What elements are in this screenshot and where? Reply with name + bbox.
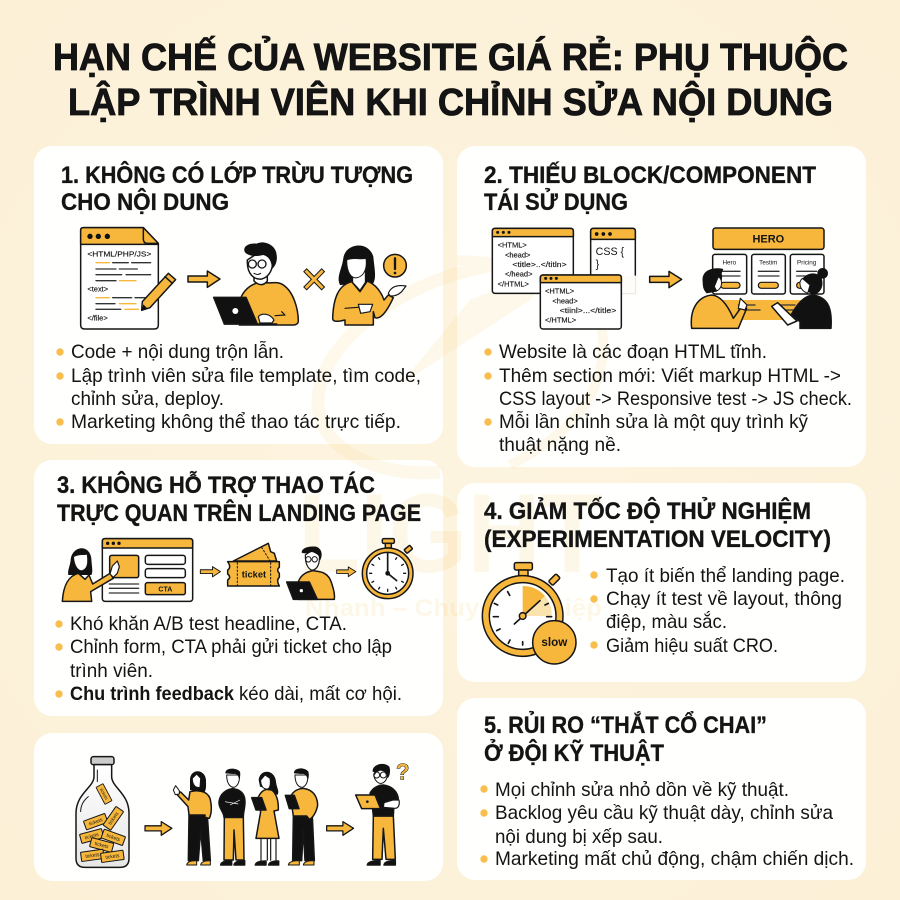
bullet list: card 5: Mọi chỉnh sửa nhỏ dồn về kỹ thuật.	[495, 779, 789, 801]
icon: HTML and CSS windows: <HTML>	[498, 241, 527, 250]
arrow	[337, 567, 356, 577]
heading: card 1: CHO NỘI DUNG	[61, 188, 229, 216]
heading: card 4	[484, 496, 831, 553]
icon: browser with woman pointing	[62, 539, 193, 601]
icon: bottle of tickets: tickets	[107, 811, 121, 826]
watermark logo	[298, 260, 603, 622]
icon: hero block board with two people: Hero	[722, 260, 737, 267]
icon: confused developer with laptop: ?	[396, 758, 410, 784]
icon: confused developer with laptop	[356, 758, 410, 865]
icon: code file with pencil: </file>	[87, 313, 108, 322]
icon: bottle of tickets: tickets	[85, 852, 100, 860]
bullet list: card 2: CSS layout -> Responsive test -> JS check.	[499, 388, 852, 410]
illustration: landing page to ticket to developer to stopwatch	[62, 539, 413, 601]
bullet list: card 1: Marketing không thể thao tác trực tiếp.	[71, 411, 401, 433]
icon: marketing woman	[333, 246, 406, 325]
icon: HTML and CSS windows: }	[596, 259, 600, 271]
heading: card 1	[61, 161, 413, 216]
heading: card 3: TRỰC QUAN TRÊN LANDING PAGE	[57, 499, 421, 527]
icon: man with crossed arms	[219, 769, 245, 865]
bullet list: card 1: Code + nội dung trộn lẫn.	[71, 340, 284, 363]
heading: card 2	[484, 161, 816, 216]
icon: bottle of tickets: tickets	[99, 787, 109, 800]
icon: HTML and CSS windows: </HTML>	[545, 316, 576, 325]
icon: developer with laptop	[214, 242, 298, 325]
title: HẠN CHẾ CỦA WEBSITE GIÁ RẺ: PHỤ THUỘC	[53, 34, 848, 79]
bullet list: card 1: chỉnh sửa, deploy.	[71, 388, 224, 410]
heading: card 2: TÁI SỬ DỤNG	[484, 187, 628, 216]
bullet list: card 2: thuật nặng nề.	[499, 434, 621, 456]
icon: bottle of tickets: tickets	[88, 817, 104, 828]
heading: card 5: 5. RỦI RO “THẮT CỔ CHAI”	[484, 710, 767, 739]
title	[53, 34, 848, 124]
icon: bottle of tickets: tickets	[105, 853, 120, 861]
bullet list: card 4: Tạo ít biến thể landing page.	[606, 565, 845, 587]
icon: bottle of tickets	[76, 757, 129, 867]
icon: slow stopwatch: slow	[541, 636, 568, 649]
icon: HTML and CSS windows: <title>..</titln>	[512, 260, 567, 269]
heading: card 5	[484, 710, 767, 767]
bullet list: card 2: Website là các đoạn HTML tĩnh.	[499, 341, 767, 363]
icon: hero block board with two people	[691, 228, 831, 328]
icon: woman in yellow dress with tablet	[252, 772, 279, 865]
icon: code file with pencil	[81, 228, 176, 329]
icon: code file with pencil: <text>	[87, 285, 108, 294]
bullet list: card 3: Chỉnh form, CTA phải gửi ticket cho lập	[70, 636, 392, 658]
icon: HTML and CSS windows: </head>	[505, 270, 532, 279]
arrow	[327, 822, 354, 835]
icon: HTML and CSS windows: <head>	[505, 250, 530, 259]
icon: woman pointing	[173, 771, 211, 865]
bullet list: card 2: Thêm section mới: Viết markup HTML ->	[499, 365, 841, 387]
bullet list: card 5: Marketing mất chủ động, chậm chiến dịch.	[495, 848, 854, 870]
bullet list: card 2	[484, 341, 852, 456]
heading: card 3: 3. KHÔNG HỖ TRỢ THAO TÁC	[57, 470, 375, 499]
bullet list: card 4: điệp, màu sắc.	[606, 610, 727, 633]
panel: card 5	[480, 710, 854, 870]
panel: card 2	[484, 161, 852, 456]
arrow	[200, 567, 220, 577]
heading: card 4: (EXPERIMENTATION VELOCITY)	[484, 526, 831, 553]
icon: bottle of tickets: tickets	[94, 841, 110, 850]
icon: HTML and CSS windows: </HTML>	[498, 279, 529, 288]
heading: card 5: Ở ĐỘI KỸ THUẬT	[484, 738, 664, 767]
icon: slow stopwatch	[482, 563, 576, 664]
bullet list: card 3: Khó khăn A/B test headline, CTA.	[70, 613, 347, 635]
bullet list: card 4	[590, 565, 845, 657]
bullet list: card 4: Chạy ít test về layout, thông	[606, 588, 842, 610]
bullet list: card 5	[480, 779, 854, 870]
panel: card backgrounds	[34, 146, 866, 881]
watermark logo: Nhanh – Chuyên nghiệp	[305, 595, 602, 622]
bullet list: card 3: trình viên.	[70, 660, 153, 682]
icon: bottle of tickets: tickets	[105, 833, 121, 843]
icon: HTML and CSS windows: <tiinl>...</title>	[560, 306, 616, 315]
heading: card 2: 2. THIẾU BLOCK/COMPONENT	[484, 161, 816, 189]
icon: HTML and CSS windows: CSS {	[596, 246, 625, 258]
bullet list: card 3: Chu trình feedback	[70, 683, 234, 705]
arrow	[650, 271, 682, 288]
arrow	[188, 271, 220, 287]
heading: card 1: 1. KHÔNG CÓ LỚP TRỪU TƯỢNG	[61, 161, 413, 189]
bullet list: card 1: Lập trình viên sửa file template, tìm code,	[71, 365, 421, 387]
bullet list: card 4: Giảm hiệu suất CRO.	[606, 635, 778, 657]
panel: card 3	[55, 470, 421, 705]
icon: man with yellow sweater and tablet	[285, 768, 318, 865]
icon: cross	[307, 272, 322, 287]
watermark logo: LIGHT	[298, 471, 603, 596]
icon: ticket: ticket	[242, 569, 266, 579]
bullet list: card 2: Mỗi lần chỉnh sửa là một quy trình kỹ	[499, 410, 808, 433]
icon: hero block board with two people: Testim	[759, 260, 777, 267]
icon: ticket	[228, 543, 279, 586]
bullet list: card 5: Backlog yêu cầu kỹ thuật dày, chỉnh sửa	[495, 802, 833, 824]
icon: code file with pencil: <HTML/PHP/JS>	[87, 250, 151, 259]
heading: card 4: 4. GIẢM TỐC ĐỘ THỬ NGHIỆM	[484, 496, 811, 525]
icon: hero block board with two people: Pricing	[797, 260, 817, 267]
icon: HTML and CSS windows: <HTML>	[545, 287, 574, 296]
title: LẬP TRÌNH VIÊN KHI CHỈNH SỬA NỘI DUNG	[68, 79, 833, 124]
bullet list: card 3	[55, 613, 402, 705]
bullet list: card 5: nội dung bị xếp sau.	[495, 826, 663, 848]
illustration: code file to developer, not marketing	[81, 228, 406, 329]
icon: HTML and CSS windows: <head>	[552, 296, 578, 305]
icon: browser with woman pointing: CTA	[158, 586, 172, 593]
bullet list: card 3: kéo dài, mất cơ hội.	[239, 683, 402, 705]
icon: bottle of tickets: tickets	[84, 832, 100, 841]
panel: card 4	[482, 496, 845, 664]
arrow	[145, 822, 172, 835]
icon: small developer with laptop	[287, 547, 335, 599]
illustration: static HTML to reusable blocks	[492, 228, 831, 329]
icon: HTML and CSS windows	[492, 228, 638, 329]
icon: hero block board with two people: HERO	[752, 233, 785, 245]
bullet list: card 1	[56, 340, 421, 433]
heading: card 3	[57, 470, 421, 527]
panel: bottleneck illustration	[76, 757, 410, 867]
icon: stopwatch	[362, 539, 413, 599]
panel: card 1	[56, 161, 421, 433]
